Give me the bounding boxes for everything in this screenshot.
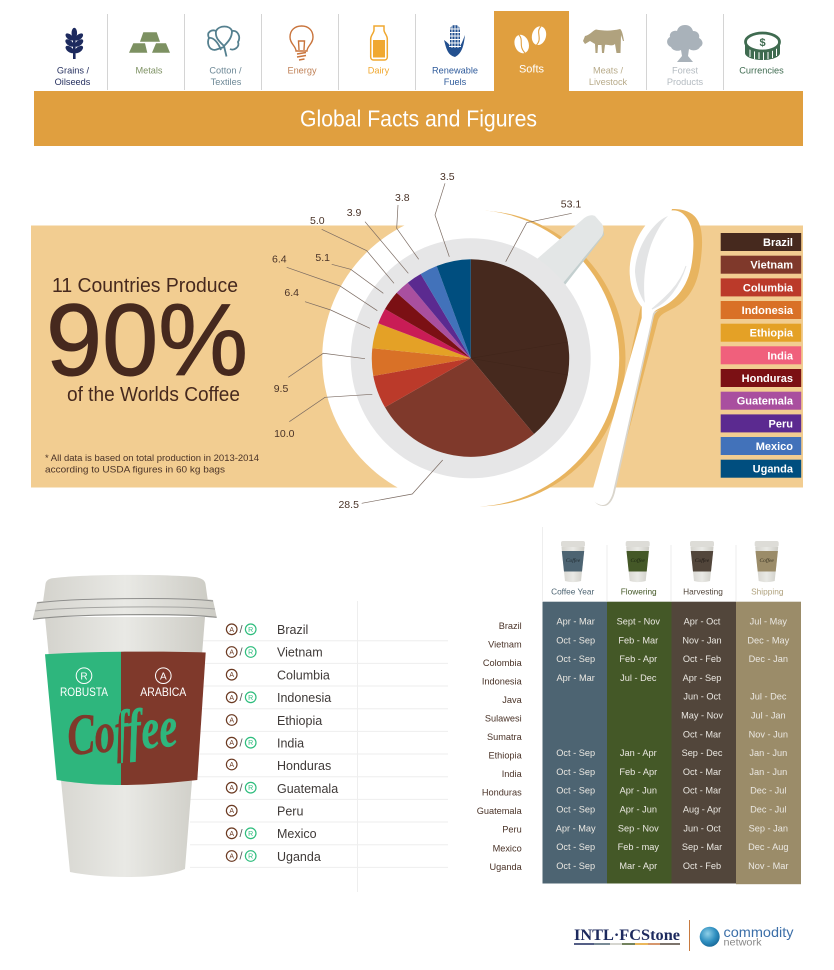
pie leader lines and values: 6.4 xyxy=(284,287,299,299)
tab: grains xyxy=(55,28,91,87)
header cup: flowering: Coffee xyxy=(631,557,645,564)
row: Guatemala: R xyxy=(248,785,253,792)
row: Mexico: A xyxy=(229,831,234,838)
schedule country labels: Honduras xyxy=(482,788,522,798)
label: robusta: ROBUSTA xyxy=(60,685,108,699)
logo: commodity network: commodity xyxy=(724,924,794,940)
tab: forest xyxy=(667,25,704,87)
column: shipping: Nov - Jun xyxy=(749,729,788,739)
row: Vietnam: R xyxy=(248,650,253,656)
column: flowering: Apr - Jun xyxy=(620,786,657,796)
row: Peru xyxy=(226,804,303,818)
column: shipping: Jul - Jan xyxy=(751,710,786,720)
row: Indonesia: / xyxy=(239,692,243,704)
column: shipping: Jul - May xyxy=(750,616,787,626)
logo: commodity network xyxy=(700,924,794,948)
footnote: * All data is based on total production in 2013-2014 xyxy=(45,453,259,464)
schedule country labels: Sulawesi xyxy=(485,714,522,724)
tab: cotton xyxy=(208,26,242,87)
legend item: Columbia xyxy=(721,278,801,296)
column: harvesting: Jun - Oct xyxy=(683,692,721,702)
tab: currencies xyxy=(739,33,784,76)
tab: meats xyxy=(583,29,628,87)
header cup: flowering xyxy=(621,541,657,596)
column: harvesting: Jun - Oct xyxy=(683,823,721,833)
header cup: coffee year: Coffee xyxy=(566,557,581,564)
logo: INTL FCStone: INTL·FCStone xyxy=(574,927,680,944)
column: coffee year: Oct - Sep xyxy=(556,861,595,871)
label: robusta: R xyxy=(80,672,88,682)
column: shipping: Jul - Dec xyxy=(750,692,787,702)
tab: cotton: Cotton / xyxy=(209,66,242,76)
header cup: harvesting xyxy=(683,541,723,596)
row: Mexico: Mexico xyxy=(277,827,317,841)
column: flowering: Feb - Apr xyxy=(619,654,657,664)
tab: forest: Forest xyxy=(672,66,698,76)
pie leader lines and values: 10.0 xyxy=(274,428,295,440)
column: coffee year: Apr - Mar xyxy=(557,673,595,683)
column: coffee year: Apr - Mar xyxy=(557,616,595,626)
label: arabica xyxy=(140,668,186,699)
row: Vietnam: A xyxy=(229,650,234,656)
label: robusta xyxy=(60,668,108,699)
column: harvesting: Oct - Feb xyxy=(683,654,721,664)
tab: metals: Metals xyxy=(135,66,163,76)
column: harvesting: Sep - Dec xyxy=(682,748,723,758)
pie leader lines and values: 6.4 xyxy=(272,254,287,266)
legend item: Honduras: Honduras xyxy=(742,373,793,385)
legend item: India xyxy=(721,346,801,364)
row: Guatemala: A xyxy=(229,785,234,792)
row: Peru: A xyxy=(229,808,234,815)
legend item: Uganda: Uganda xyxy=(753,464,794,476)
row: Uganda: Uganda xyxy=(277,850,321,864)
logo divider xyxy=(688,920,690,951)
pie leader lines and values: 28.5 xyxy=(338,499,359,511)
column: harvesting: Oct - Mar xyxy=(683,767,721,777)
legend item: Ethiopia xyxy=(721,324,801,342)
pie slice: Indonesia xyxy=(372,348,471,376)
pie slice: Mexico xyxy=(421,266,471,358)
schedule country labels: Uganda xyxy=(490,862,523,872)
column: coffee year: Oct - Sep xyxy=(556,842,595,852)
tab: renewable fuels: Renewable xyxy=(432,66,478,76)
row: Brazil: A xyxy=(229,627,234,634)
column: harvesting: May - Nov xyxy=(681,710,723,720)
header cup: flowering: Flowering xyxy=(621,586,657,596)
title banner: Global Facts and Figures xyxy=(300,106,537,132)
column: flowering: Mar - Apr xyxy=(619,861,657,871)
tab: cotton: Textiles xyxy=(211,77,242,87)
row: Ethiopia xyxy=(226,714,322,728)
column: shipping: Jan - Jun xyxy=(749,767,787,777)
column: harvesting: Oct - Mar xyxy=(683,729,721,739)
footnote: according to USDA figures in 60 kg bags xyxy=(45,464,225,476)
column: shipping: Nov - Mar xyxy=(748,861,788,871)
row: Ethiopia: A xyxy=(229,718,234,724)
pie leader lines and values: 5.1 xyxy=(315,252,330,264)
header cup: harvesting: Coffee xyxy=(695,557,710,564)
column: harvesting: Aug - Apr xyxy=(683,804,721,814)
schedule header dividers xyxy=(542,527,736,601)
schedule country labels: India xyxy=(502,769,523,779)
column: coffee year: Oct - Sep xyxy=(556,804,595,814)
column: harvesting xyxy=(672,602,736,884)
headline text: 11 Countries Produce xyxy=(52,275,238,297)
pie slice: Peru xyxy=(408,274,471,358)
row: Ethiopia: Ethiopia xyxy=(277,714,322,728)
header cup: shipping xyxy=(751,541,784,596)
schedule country labels: Sumatra xyxy=(487,732,523,742)
legend item: Brazil xyxy=(721,233,801,251)
coffee script: brown part: Coffee xyxy=(64,694,180,768)
row: Guatemala xyxy=(226,782,338,796)
row: India: / xyxy=(239,737,243,749)
legend item: Ethiopia: Ethiopia xyxy=(750,328,794,340)
row: India: India xyxy=(277,736,304,750)
coffee cup pie chart xyxy=(322,210,626,507)
schedule country labels: Mexico xyxy=(493,843,522,853)
navigation tabs xyxy=(55,11,784,92)
tab: energy: Energy xyxy=(287,66,317,76)
tab: dairy xyxy=(368,26,390,76)
row: India: A xyxy=(229,740,234,747)
column: coffee year: Oct - Sep xyxy=(556,748,595,758)
tab: currencies: $ xyxy=(759,37,766,49)
row: India: R xyxy=(248,740,253,747)
legend item: India: India xyxy=(767,350,794,362)
pie leader lines and values: 3.8 xyxy=(395,192,410,204)
schedule country labels: Vietnam xyxy=(488,639,522,649)
column: harvesting: Apr - Sep xyxy=(683,673,721,683)
pie leader lines and values: 9.5 xyxy=(274,383,288,395)
pie slice: India xyxy=(378,309,471,358)
row: Columbia: Columbia xyxy=(277,668,330,682)
column: harvesting: Apr - Oct xyxy=(684,616,721,626)
row: Honduras xyxy=(226,759,331,773)
column: flowering xyxy=(607,602,672,884)
large coffee cup xyxy=(33,575,217,877)
tab: grains: Oilseeds xyxy=(55,77,91,87)
tab: softs active: Softs xyxy=(519,64,545,76)
column: coffee year: Oct - Sep xyxy=(556,635,595,645)
pie slice: Columbia xyxy=(373,358,471,407)
row: Vietnam: Vietnam xyxy=(277,646,323,660)
header cup: shipping: Shipping xyxy=(751,586,784,596)
legend item: Indonesia: Indonesia xyxy=(742,305,794,317)
tab: meats: Livestock xyxy=(589,77,628,87)
header cup: harvesting: Harvesting xyxy=(683,586,723,596)
tab: dairy: Dairy xyxy=(368,66,390,76)
row: Guatemala: Guatemala xyxy=(277,782,338,796)
pie slice: Guatemala xyxy=(397,283,471,358)
tab: softs active xyxy=(494,11,569,92)
sleeve: arabica xyxy=(121,652,206,785)
legend item: Peru xyxy=(721,414,801,432)
tab: currencies: Currencies xyxy=(739,66,784,76)
species table xyxy=(190,601,448,892)
logo: commodity network: network xyxy=(724,936,762,948)
row: Columbia: A xyxy=(229,672,234,679)
row: India xyxy=(226,736,304,750)
sleeve: robusta xyxy=(45,652,121,785)
header cup: coffee year: Coffee Year xyxy=(551,586,595,596)
legend item: Mexico xyxy=(721,437,801,455)
column: shipping xyxy=(736,602,801,884)
tab: forest: Products xyxy=(667,77,704,87)
column: harvesting: Oct - Feb xyxy=(683,861,721,871)
column: shipping: Dec - May xyxy=(747,635,790,645)
column: shipping: Dec - Jan xyxy=(749,654,788,664)
headline text: of the Worlds Coffee xyxy=(67,384,240,406)
label: arabica: A xyxy=(160,672,167,682)
panel: production band xyxy=(31,226,803,488)
column: shipping: Dec - Jul xyxy=(750,786,786,796)
schedule country labels xyxy=(477,621,523,872)
spoon xyxy=(591,209,702,506)
row: Mexico: R xyxy=(248,831,253,838)
row: Uganda xyxy=(226,850,321,864)
legend item: Vietnam xyxy=(721,256,801,274)
column: coffee year: Oct - Sep xyxy=(556,654,595,664)
column: flowering: Feb - Mar xyxy=(618,635,658,645)
row: Uganda: / xyxy=(239,851,243,863)
row: Brazil xyxy=(226,623,308,637)
legend item: Guatemala xyxy=(721,392,801,410)
pie slice: Honduras xyxy=(385,293,471,358)
headline text: 90% xyxy=(46,283,248,397)
column: coffee year: Oct - Sep xyxy=(556,767,595,777)
tab: energy xyxy=(287,26,317,76)
legend item: Indonesia xyxy=(721,301,801,319)
tab: renewable fuels xyxy=(432,25,478,87)
row: Uganda: A xyxy=(229,854,234,860)
header cup: shipping: Coffee xyxy=(760,557,774,564)
pie slice: Uganda xyxy=(437,259,471,358)
schedule country labels: Java xyxy=(502,695,523,705)
legend item: Uganda xyxy=(721,460,801,478)
pie leader lines and values xyxy=(272,171,581,511)
legend item: Honduras xyxy=(721,369,801,387)
pie slice: Vietnam xyxy=(385,358,534,457)
schedule country labels: Colombia xyxy=(483,658,523,668)
pie leader lines and values: 53.1 xyxy=(561,198,581,210)
column: shipping: Dec - Aug xyxy=(748,842,788,852)
row: Uganda: R xyxy=(248,854,253,860)
row: Brazil: R xyxy=(248,627,253,634)
column: harvesting: Nov - Jan xyxy=(682,635,722,645)
row: Guatemala: / xyxy=(239,782,243,794)
column: coffee year: Apr - May xyxy=(556,823,596,833)
label: arabica: ARABICA xyxy=(140,685,186,699)
row: Vietnam: / xyxy=(239,647,243,659)
pie leader lines and values: 5.0 xyxy=(310,215,325,227)
header cup: coffee year xyxy=(551,541,595,596)
tab: grains: Grains / xyxy=(57,66,90,76)
row: Indonesia xyxy=(226,691,331,705)
column: coffee year: Oct - Sep xyxy=(556,786,595,796)
column: harvesting: Sep - Mar xyxy=(682,842,722,852)
pie slice: Ethiopia xyxy=(372,323,471,358)
coffee script: green part: Coffee xyxy=(64,694,180,768)
column: harvesting: Oct - Mar xyxy=(683,786,721,796)
row: Honduras: Honduras xyxy=(277,759,331,773)
legend item: Vietnam: Vietnam xyxy=(750,260,793,272)
legend xyxy=(721,233,801,478)
column: flowering: Sep - Nov xyxy=(618,823,659,833)
tab: metals xyxy=(129,32,170,76)
pie leader lines and values: 3.5 xyxy=(440,171,455,183)
legend item: Peru: Peru xyxy=(769,418,793,430)
schedule country labels: Peru xyxy=(502,825,522,835)
schedule country labels: Guatemala xyxy=(477,806,523,816)
pie leader lines and values: 3.9 xyxy=(347,207,361,219)
schedule country labels: Indonesia xyxy=(482,676,523,686)
column: coffee year xyxy=(542,602,607,884)
column: flowering: Jul - Dec xyxy=(620,673,657,683)
schedule country labels: Brazil xyxy=(499,621,522,631)
legend item: Mexico: Mexico xyxy=(756,441,793,453)
row: Indonesia: R xyxy=(248,695,253,702)
tab: renewable fuels: Fuels xyxy=(444,77,467,87)
row: Peru: Peru xyxy=(277,804,303,818)
column: flowering: Apr - Jun xyxy=(620,804,657,814)
tab: meats: Meats / xyxy=(593,66,624,76)
column: flowering: Sept - Nov xyxy=(617,616,660,626)
legend item: Brazil: Brazil xyxy=(763,237,793,249)
title banner xyxy=(34,91,803,146)
column: flowering: Feb - Apr xyxy=(619,767,657,777)
row: Mexico xyxy=(226,827,317,841)
row: Indonesia: Indonesia xyxy=(277,691,331,705)
row: Vietnam xyxy=(226,646,323,660)
row: Columbia xyxy=(226,668,330,682)
row: Indonesia: A xyxy=(229,695,234,702)
legend item: Guatemala: Guatemala xyxy=(737,396,794,408)
legend item: Columbia: Columbia xyxy=(743,282,794,294)
column: shipping: Jan - Jun xyxy=(749,748,787,758)
column: shipping: Sep - Jan xyxy=(749,823,788,833)
column: flowering: Feb - may xyxy=(618,842,659,852)
pie slice: Brazil xyxy=(471,259,569,434)
row: Mexico: / xyxy=(239,828,243,840)
column: flowering: Jan - Apr xyxy=(620,748,657,758)
row: Brazil: Brazil xyxy=(277,623,308,637)
schedule country labels: Ethiopia xyxy=(488,751,523,761)
row: Brazil: / xyxy=(239,624,243,636)
footnote xyxy=(45,453,259,476)
row: Honduras: A xyxy=(229,762,234,769)
column: shipping: Dec - Jul xyxy=(750,804,786,814)
